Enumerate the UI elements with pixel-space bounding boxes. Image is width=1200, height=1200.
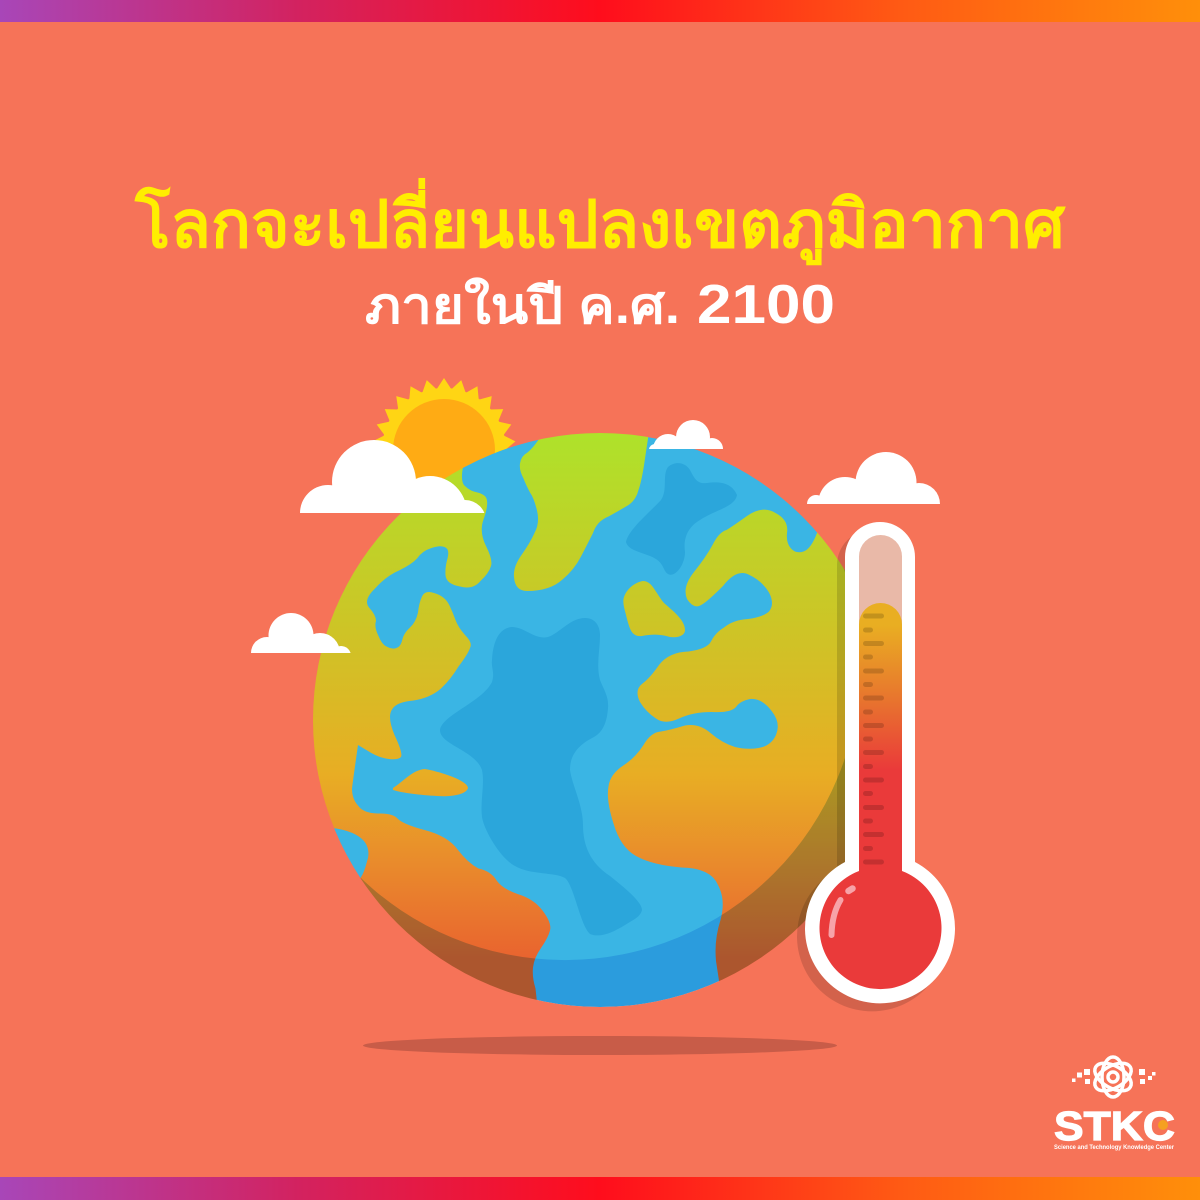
land: western landmass bbox=[313, 468, 550, 1000]
cloud: left small bbox=[251, 613, 350, 653]
logo orange dot bbox=[1158, 1120, 1168, 1130]
land: small island lower left bbox=[393, 769, 468, 796]
subtitle: ภายในปี ค.ศ. bbox=[365, 277, 680, 334]
cloud: top centre small bbox=[649, 420, 723, 449]
scale ticks bbox=[863, 614, 884, 864]
logo tagline: Science and Technology Knowledge Center bbox=[1054, 1145, 1175, 1151]
bottom gradient bar bbox=[0, 1177, 1200, 1200]
globe bbox=[313, 433, 845, 1007]
bulb highlight bbox=[832, 888, 852, 935]
subtitle: 2100 bbox=[697, 273, 835, 335]
land: small island centre right bbox=[623, 581, 685, 637]
thermometer bbox=[797, 522, 955, 1011]
subtitle bbox=[365, 273, 835, 335]
icon: sun bbox=[372, 378, 516, 522]
logo: STKC bbox=[1054, 1057, 1175, 1151]
cloud: upper left large bbox=[300, 440, 484, 513]
logo atom icon bbox=[1090, 1057, 1136, 1097]
globe shadow crescent bbox=[360, 568, 845, 1007]
thermometer shadow bbox=[797, 530, 947, 1011]
thermometer body bbox=[805, 522, 955, 1003]
title: โลกจะเปลี่ยนแปลงเขตภูมิอากาศ bbox=[134, 177, 1066, 266]
deep ocean: upper right bbox=[626, 463, 737, 575]
land: eastern landmass bbox=[608, 510, 845, 981]
ground shadow bbox=[363, 1036, 837, 1055]
land: northern landmass bbox=[514, 425, 650, 591]
ocean: lower left bay bbox=[334, 828, 368, 878]
deep ocean: central bbox=[440, 618, 642, 935]
glass tube bbox=[859, 535, 902, 640]
cloud: top right bbox=[807, 452, 940, 504]
logo pixel squares bbox=[1072, 1069, 1156, 1084]
logo wordmark: STKC bbox=[1054, 1103, 1175, 1149]
top gradient bar bbox=[0, 0, 1200, 22]
mercury fluid bbox=[820, 603, 942, 989]
